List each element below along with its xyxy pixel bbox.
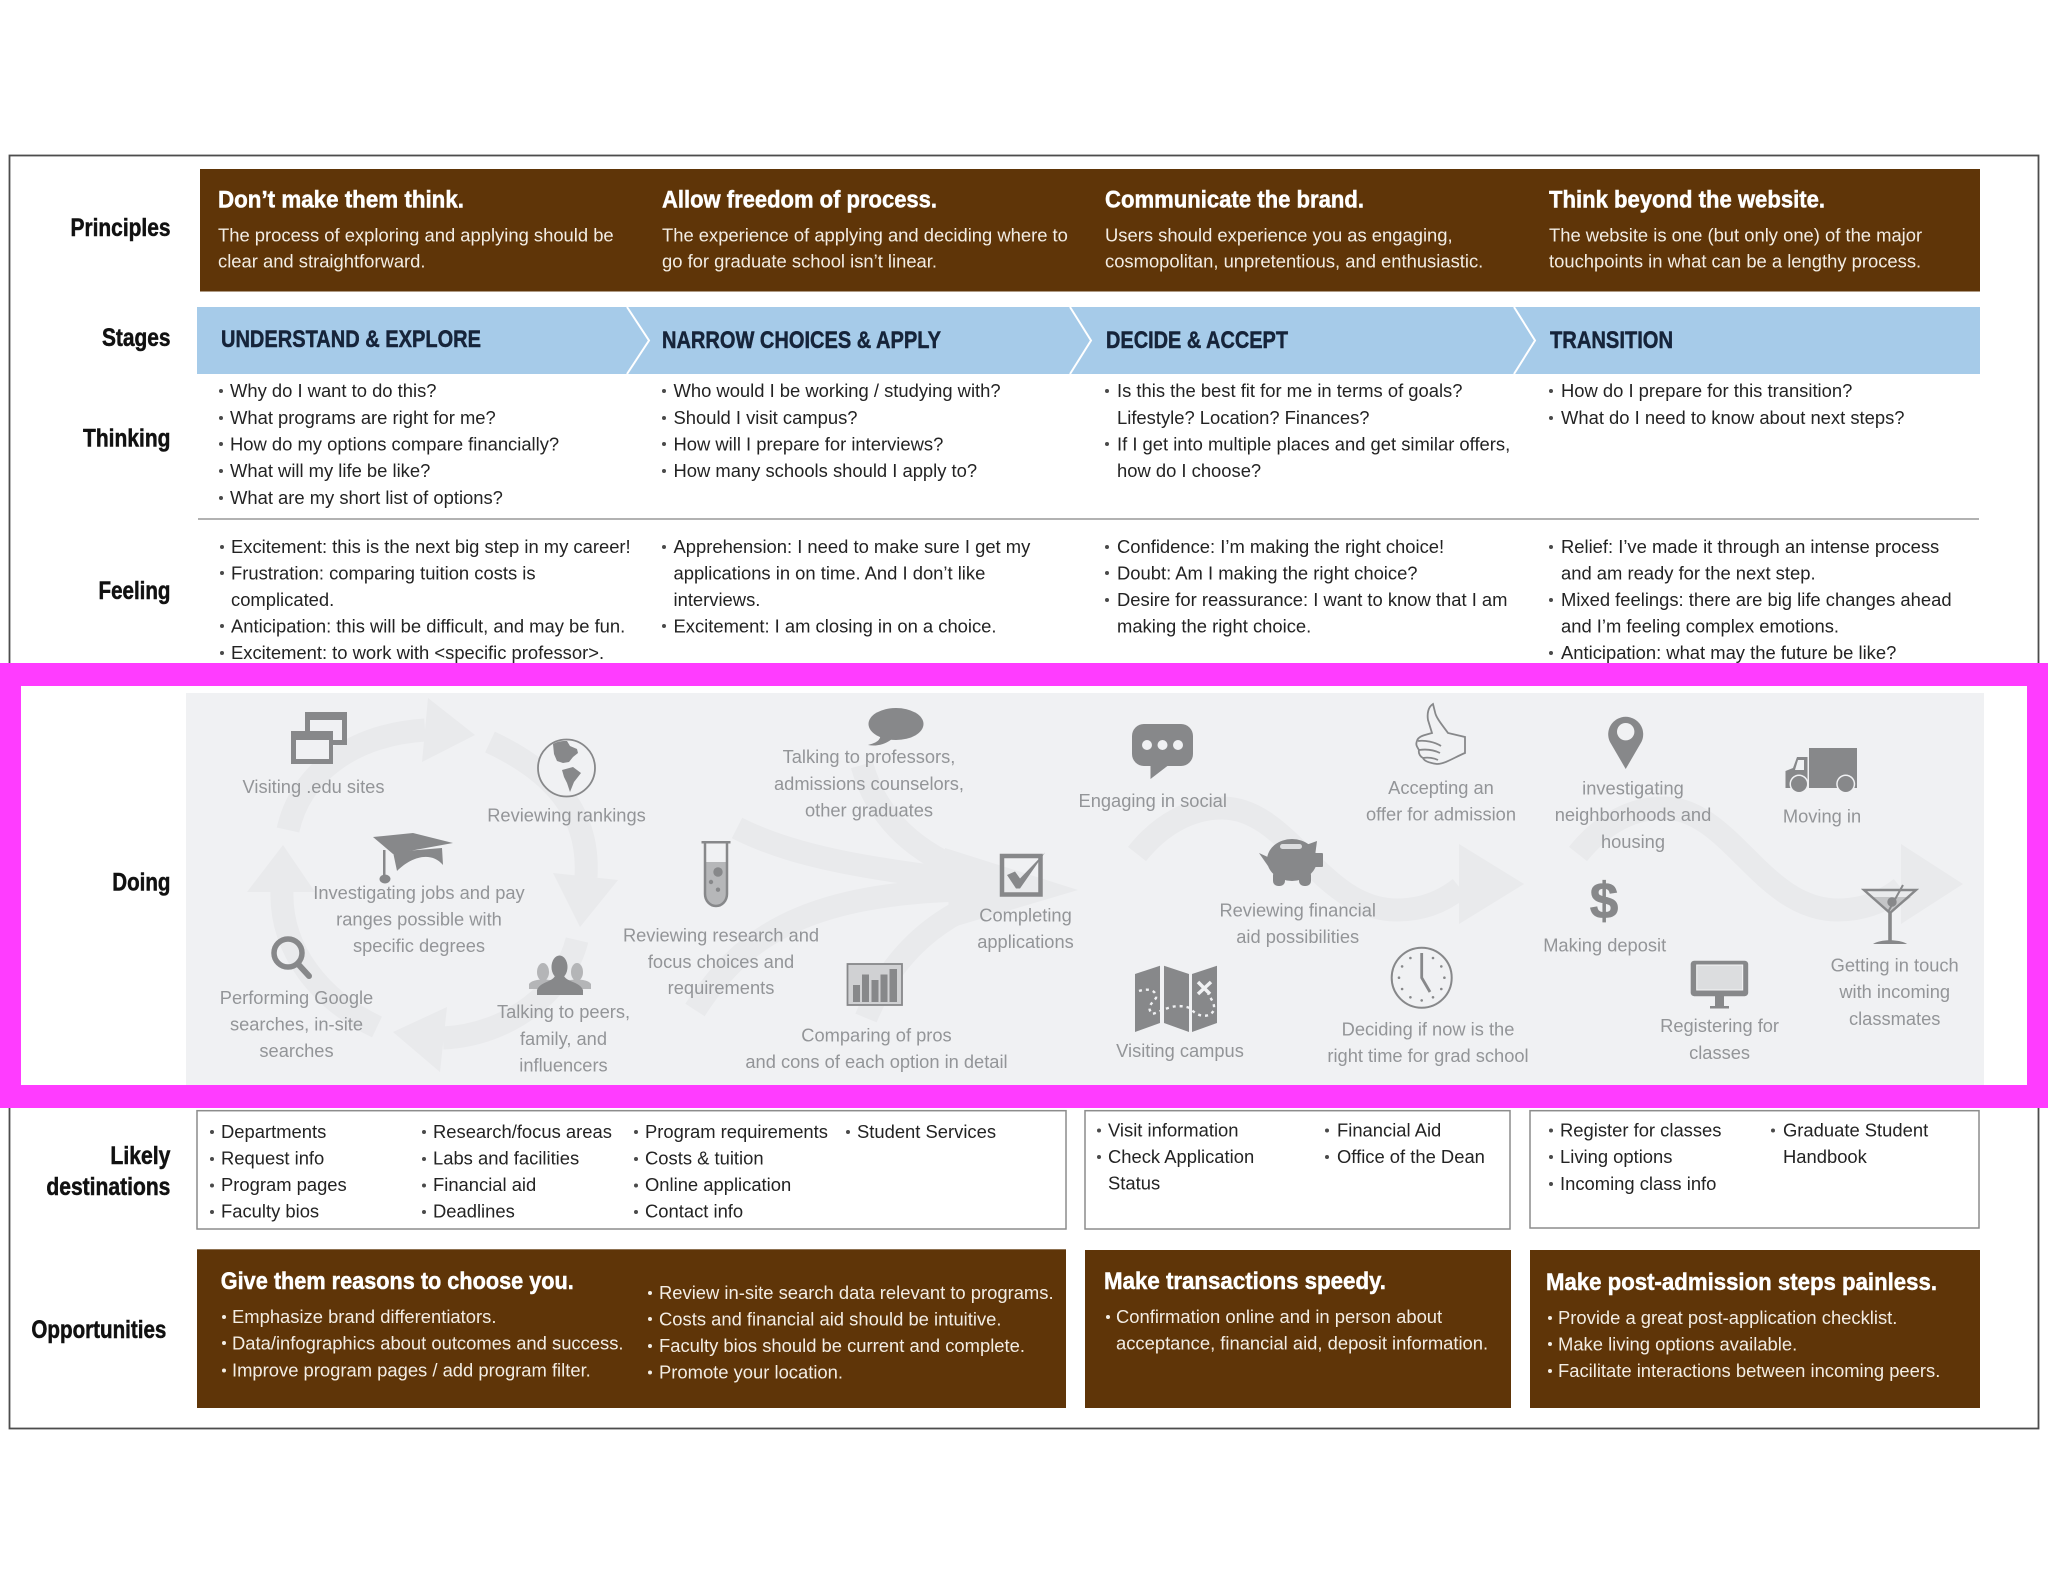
item: Getting in touch (1831, 885, 1959, 1029)
item: Moving in: Moving in (1783, 806, 1861, 826)
item: Visiting .edu sites (243, 712, 384, 797)
opportunity 1: Faculty bios should be current and complete. (659, 1335, 1025, 1356)
item: Investigating jobs: specific degrees (353, 935, 485, 956)
item: Registering for classes (1660, 961, 1779, 1063)
feeling: stage 2 (662, 536, 1031, 636)
principle 4: Think beyond the website. (1549, 186, 1825, 214)
item: Talking to professors: admissions counselors, (774, 773, 964, 794)
principle 2: go for graduate school isn’t linear. (662, 250, 937, 272)
destinations box 1: Request info (221, 1148, 324, 1168)
panel: doing (186, 693, 1984, 1085)
item: Engaging in social (1079, 724, 1227, 811)
thinking: stage 2: How many schools should I apply to? (674, 460, 977, 481)
item: Investigating neighborhoods: neighborhoods and (1555, 804, 1711, 825)
principle 1: The process of exploring and applying should be (218, 224, 614, 246)
destinations box 1: Labs and facilities (433, 1148, 579, 1168)
icon: test tube (702, 841, 730, 906)
item: Talking to professors: Talking to professors, (783, 746, 955, 767)
thinking: stage 1: What will my life be like? (230, 460, 430, 481)
item: Visiting campus: Visiting campus (1116, 1040, 1244, 1061)
thinking: stage 1: What programs are right for me? (230, 407, 496, 428)
thinking: stage 2: Should I visit campus? (674, 407, 858, 428)
stage 2: NARROW CHOICES & APPLY (662, 327, 941, 354)
item: Reviewing research: focus choices and (648, 951, 794, 972)
icon: speech bubble (868, 708, 924, 746)
item: Completing applications (977, 852, 1074, 952)
feeling: stage 1: Excitement: this is the next big step in my career! (231, 536, 631, 557)
principle 3: Communicate the brand. (1105, 186, 1364, 214)
feeling: stage 1 (220, 536, 631, 663)
feeling: stage 2: Excitement: I am closing in on a choice. (674, 616, 997, 636)
destinations box 3: Graduate Student (1783, 1120, 1928, 1140)
icon: people (529, 956, 591, 995)
item: Comparing pros and cons: Comparing of pros (801, 1024, 952, 1046)
item: Investigating neighborhoods: investigating (1582, 778, 1684, 798)
item: Getting in touch: Getting in touch (1831, 954, 1959, 976)
destinations box 1: Program requirements (645, 1121, 828, 1142)
item: Completing applications: applications (977, 931, 1074, 952)
outer frame (10, 156, 2038, 1428)
opportunity 2: Make transactions speedy. (1104, 1268, 1386, 1295)
item: Accepting an offer: offer for admission (1366, 804, 1516, 824)
opportunity 3 (1530, 1250, 1980, 1408)
item: Investigating neighborhoods (1555, 717, 1711, 852)
thinking: stage 3 (1105, 380, 1510, 481)
destinations box 3 (1530, 1111, 1979, 1228)
opportunity 2: acceptance, financial aid, deposit information. (1116, 1332, 1488, 1354)
icon: monitor (1691, 961, 1748, 1008)
feeling: stage 4: Anticipation: what may the future be like? (1561, 642, 1896, 663)
item: Performing Google searches (220, 939, 373, 1061)
stage 3: DECIDE & ACCEPT (1106, 327, 1288, 354)
item: Making deposit (1543, 872, 1666, 956)
highlight band: magenta frame around Doing row (0, 663, 2048, 1108)
item: Accepting an offer (1366, 704, 1516, 824)
thinking: stage 4: How do I prepare for this transition? (1561, 380, 1852, 401)
arrows: converging paths (695, 765, 1078, 1018)
feeling: stage 3: Doubt: Am I making the right choice? (1117, 562, 1418, 584)
thinking: stage 3: If I get into multiple places and get similar offers, (1117, 434, 1510, 454)
feeling: stage 3 (1105, 536, 1507, 636)
row label: Opportunities: Opportunities (31, 1316, 166, 1344)
feeling: stage 3: making the right choice. (1117, 616, 1311, 636)
destinations box 2: Office of the Dean (1337, 1146, 1485, 1167)
destinations box 1: Online application (645, 1174, 791, 1195)
item: Performing Google searches: Performing Google (220, 987, 373, 1008)
destinations box 1: Program pages (221, 1174, 347, 1195)
principle 2: Allow freedom of process. (662, 186, 937, 214)
thinking: stage 1 (219, 380, 559, 508)
item: Visiting campus (1116, 966, 1244, 1061)
icon: globe (538, 740, 595, 796)
destinations box 1: Departments (221, 1121, 326, 1142)
icon: folded map (1135, 966, 1217, 1032)
principle 1 (218, 186, 614, 272)
thinking: stage 2: How will I prepare for interviews? (674, 434, 943, 454)
thinking: stage 2: Who would I be working / studying with? (674, 380, 1001, 401)
thinking: stage 3: how do I choose? (1117, 460, 1261, 481)
item: Accepting an offer: Accepting an (1388, 777, 1494, 798)
feeling: stage 1: Frustration: comparing tuition costs is (231, 562, 536, 584)
item: Registering for classes: Registering for (1660, 1015, 1779, 1036)
icon: browser windows (291, 712, 347, 764)
principle 2: The experience of applying and deciding where to (662, 224, 1068, 246)
feeling: stage 4: Mixed feelings: there are big life changes ahead (1561, 589, 1952, 610)
thinking: stage 1: Why do I want to do this? (230, 380, 436, 401)
item: Talking to professors: other graduates (805, 800, 933, 820)
opportunity 3: Provide a great post-application checklist. (1558, 1307, 1897, 1328)
item: Getting in touch: with incoming (1838, 981, 1950, 1002)
opportunity 1: Give them reasons to choose you. (221, 1268, 574, 1295)
row label: Likely destinations: Likely (110, 1142, 170, 1170)
icon: chat bubble (1132, 724, 1193, 779)
arrows: research cycle (247, 698, 618, 1072)
item: Visiting .edu sites: Visiting .edu sites (243, 776, 384, 797)
opportunity 2 (1085, 1250, 1511, 1408)
item: Completing applications: Completing (979, 904, 1072, 926)
opportunity 2: Confirmation online and in person about (1116, 1306, 1442, 1327)
feeling: stage 1: Anticipation: this will be difficult, and may be fun. (231, 616, 625, 636)
item: Reviewing research: Reviewing research and (623, 924, 819, 946)
item: Comparing pros and cons: and cons of each option in detail (745, 1051, 1008, 1072)
item: Deciding if now is the right time: Deciding if now is the (1342, 1018, 1514, 1040)
opportunity 1: Emphasize brand differentiators. (232, 1306, 496, 1327)
principle 1: clear and straightforward. (218, 250, 426, 272)
feeling: stage 1: Excitement: to work with <specific professor>. (231, 642, 604, 663)
item: Investigating jobs: ranges possible with (336, 908, 502, 930)
thinking: stage 4 (1549, 380, 1905, 428)
item: Investigating jobs: Investigating jobs and pay (313, 882, 526, 903)
icon: martini (1864, 885, 1916, 944)
item: Investigating neighborhoods: housing (1601, 831, 1665, 852)
item: Performing Google searches: searches (259, 1040, 334, 1061)
destinations box 3: Register for classes (1560, 1120, 1721, 1140)
feeling: stage 2: Apprehension: I need to make sure I get my (674, 536, 1031, 557)
item: Registering for classes: classes (1689, 1042, 1750, 1063)
row label: Doing: Doing (112, 868, 170, 896)
thinking: stage 1: What are my short list of options? (230, 487, 503, 508)
destinations box 3: Handbook (1783, 1146, 1868, 1167)
principle 3: cosmopolitan, unpretentious, and enthusiastic. (1105, 250, 1483, 272)
item: Engaging in social: Engaging in social (1079, 790, 1227, 811)
feeling: stage 4: Relief: I’ve made it through an intense process (1561, 536, 1939, 557)
destinations box 1: Student Services (857, 1121, 996, 1142)
item: Talking to professors (774, 708, 964, 820)
principle 4: touchpoints in what can be a lengthy process. (1549, 250, 1921, 272)
feeling: stage 4 (1549, 536, 1952, 663)
panel: stages chevrons (197, 307, 1980, 374)
row label: Likely destinations: destinations (46, 1173, 170, 1201)
feeling: stage 2: applications in on time. And I don’t like (674, 562, 985, 584)
stage 4: TRANSITION (1550, 327, 1673, 354)
item: Reviewing research (623, 841, 819, 998)
principle 3 (1105, 186, 1483, 272)
thinking: stage 1: How do my options compare financially? (230, 434, 559, 454)
destinations box 1: Deadlines (433, 1200, 515, 1222)
opportunity 1: Improve program pages / add program filter. (232, 1360, 591, 1380)
principle 4 (1549, 186, 1922, 272)
row label: Thinking: Thinking (83, 424, 170, 452)
row label: Feeling: Feeling (98, 577, 170, 605)
icon: thumbs up (1416, 704, 1465, 764)
thinking: stage 2 (662, 380, 1001, 481)
icon: magnifier (274, 939, 309, 976)
principle 3: Users should experience you as engaging, (1105, 224, 1453, 246)
item: Performing Google searches: searches, in-site (230, 1014, 363, 1034)
destinations box 1: Financial aid (433, 1174, 536, 1195)
item: Investigating jobs (313, 833, 526, 956)
destinations box 1: Faculty bios (221, 1200, 319, 1222)
item: Making deposit: Making deposit (1543, 934, 1666, 956)
icon: dollar sign: $ (1590, 872, 1618, 929)
row label: Stages: Stages (102, 324, 170, 352)
destinations box 2: Status (1108, 1172, 1160, 1194)
item: Deciding if now is the right time (1327, 948, 1529, 1066)
feeling: stage 4: and I’m feeling complex emotions. (1561, 616, 1839, 636)
opportunity 3: Make post-admission steps painless. (1546, 1269, 1937, 1296)
feeling: stage 4: and am ready for the next step. (1561, 562, 1816, 584)
opportunity 1: Promote your location. (659, 1362, 843, 1382)
icon: piggy bank (1259, 839, 1323, 886)
item: Deciding if now is the right time: right time for grad school (1327, 1045, 1529, 1066)
opportunity 3: Make living options available. (1558, 1334, 1797, 1354)
item: Talking to peers (497, 956, 630, 1076)
arrow: wave decide (1137, 808, 1524, 924)
item: Talking to peers: influencers (519, 1054, 608, 1076)
item: Reviewing financial aid: aid possibilities (1236, 926, 1359, 947)
destinations box 1: Contact info (645, 1200, 743, 1222)
destinations box 1: Costs & tuition (645, 1148, 764, 1168)
item: Talking to peers: family, and (520, 1028, 607, 1049)
item: Reviewing financial aid (1219, 839, 1376, 947)
opportunity 1: Data/infographics about outcomes and success. (232, 1332, 624, 1354)
feeling: stage 2: interviews. (674, 589, 760, 610)
row label: Likely destinations (46, 1142, 170, 1201)
destinations box 2: Check Application (1108, 1146, 1254, 1167)
stage 1: UNDERSTAND & EXPLORE (221, 326, 481, 353)
destinations box 2 (1085, 1111, 1510, 1229)
icon: truck (1786, 748, 1857, 794)
feeling: stage 3: Confidence: I’m making the right choice! (1117, 536, 1444, 557)
arrow: wave transition (1578, 808, 1963, 924)
principle 4: The website is one (but only one) of the major (1549, 224, 1922, 246)
item: Reviewing financial aid: Reviewing financial (1219, 900, 1376, 920)
principle 1: Don’t make them think. (218, 186, 464, 214)
item: Comparing pros and cons (745, 964, 1008, 1072)
feeling: stage 3: Desire for reassurance: I want to know that I am (1117, 589, 1507, 610)
item: Getting in touch: classmates (1849, 1008, 1940, 1029)
panel: principles (200, 169, 1980, 292)
destinations box 3: Incoming class info (1560, 1173, 1716, 1194)
thinking: stage 4: What do I need to know about next steps? (1561, 407, 1905, 428)
principle 2 (662, 186, 1068, 272)
destinations box 1: Research/focus areas (433, 1121, 612, 1142)
icon: graduation cap (373, 833, 453, 884)
destinations box 3: Living options (1560, 1146, 1672, 1167)
thinking: stage 3: Is this the best fit for me in terms of goals? (1117, 380, 1462, 401)
icon: clock (1392, 948, 1452, 1008)
row label: Principles: Principles (70, 214, 170, 242)
feeling: stage 1: complicated. (231, 589, 334, 610)
destinations box 1 (197, 1111, 1066, 1229)
item: Reviewing rankings: Reviewing rankings (487, 804, 646, 826)
opportunity 1: Review in-site search data relevant to programs. (659, 1282, 1054, 1303)
icon: map pin (1608, 717, 1643, 769)
icon: bar chart (848, 964, 902, 1005)
item: Reviewing research: requirements (668, 977, 774, 998)
opportunity 1 (197, 1249, 1066, 1408)
thinking: stage 3: Lifestyle? Location? Finances? (1117, 407, 1370, 428)
destinations box 2: Visit information (1108, 1120, 1238, 1140)
item: Moving in (1783, 748, 1861, 826)
item: Reviewing rankings (487, 740, 646, 826)
item: Talking to peers: Talking to peers, (497, 1001, 630, 1022)
opportunity 1: Costs and financial aid should be intuitive. (659, 1308, 1001, 1330)
icon: checkbox (1002, 852, 1045, 894)
destinations box 2: Financial Aid (1337, 1120, 1441, 1140)
opportunity 3: Facilitate interactions between incoming peers. (1558, 1360, 1940, 1381)
